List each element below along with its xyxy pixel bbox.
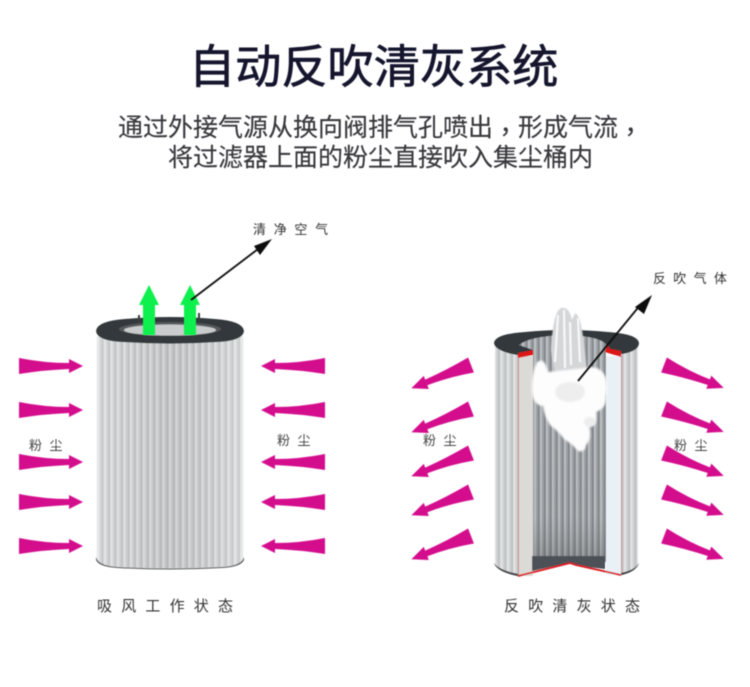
caption: reverse blow cleaning state: 反吹清灰状态 xyxy=(504,598,649,615)
black arrow: blow air pointer xyxy=(578,295,652,381)
green clean air arrows xyxy=(139,285,200,335)
pink dust arrows left side xyxy=(19,358,83,554)
label: dust left: 粉尘 xyxy=(423,433,464,448)
subtitle text block: 通过外接气源从换向阀排气孔喷出 形成气流 xyxy=(118,114,618,142)
label: clean air: 清净空气 xyxy=(253,222,336,237)
subtitle text block: 将过滤器上面的粉尘直接吹入集尘桶内 xyxy=(168,144,593,172)
panel: reverse blow cleaning state xyxy=(408,271,734,615)
subtitle text block: ， xyxy=(493,119,518,147)
label: dust right: 粉尘 xyxy=(277,433,318,448)
subtitle text block: ， xyxy=(618,119,643,147)
cleaning air plume xyxy=(532,308,607,451)
panel: suction working state xyxy=(19,222,336,615)
label: blow air: 反吹气体 xyxy=(653,271,734,286)
label: dust right: 粉尘 xyxy=(674,438,715,453)
label: dust left: 粉尘 xyxy=(29,438,70,453)
caption: suction working state: 吸风工作状态 xyxy=(97,598,242,615)
filter cartridge xyxy=(96,313,244,570)
pink dust arrows right side xyxy=(261,358,325,554)
cutaway filter cartridge xyxy=(494,330,639,576)
pink dust arrows left side xyxy=(408,358,474,567)
pink dust arrows right side xyxy=(661,358,727,566)
title: 自动反吹清灰系统 xyxy=(189,41,558,93)
black arrow: clean air pointer xyxy=(191,239,272,300)
subtitle text block xyxy=(118,114,643,172)
